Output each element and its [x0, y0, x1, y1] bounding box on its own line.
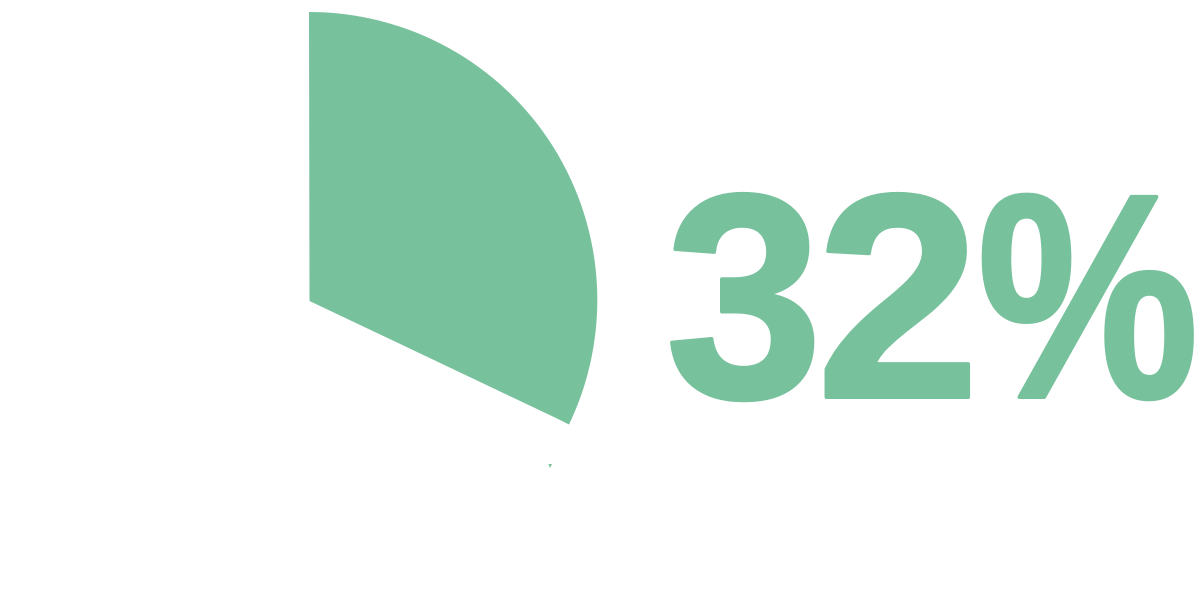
- small marker dot: [548, 464, 552, 468]
- percentage label: [666, 133, 1199, 459]
- percentage label: %: [977, 135, 1199, 459]
- pie slice: 32%: [309, 12, 597, 424]
- pie chart: [309, 12, 597, 468]
- percentage label: 2: [816, 133, 980, 459]
- percentage label: 3: [666, 134, 823, 459]
